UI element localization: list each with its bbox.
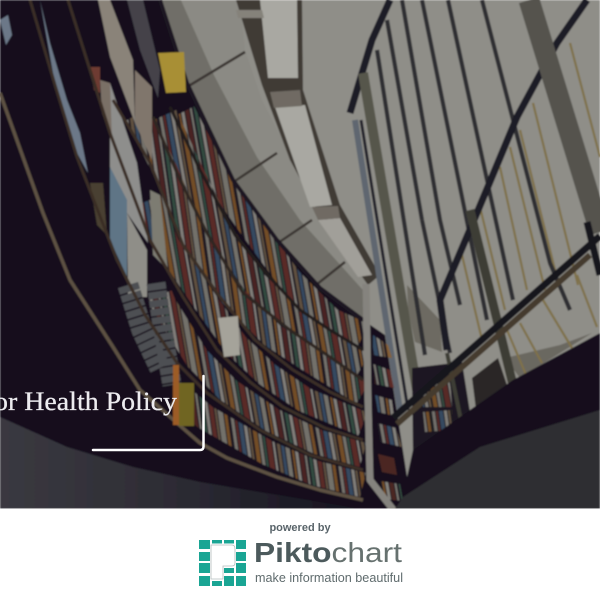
ceiling struts (187, 52, 345, 285)
white pamphlet on shelf (218, 316, 240, 357)
window books (423, 378, 452, 407)
skylight panel two (275, 105, 332, 207)
book bands (137, 112, 363, 485)
rail post (587, 222, 600, 275)
dark balcony mass (406, 332, 600, 494)
P mark outline (211, 545, 235, 579)
gold thin bars behind the rail (462, 43, 600, 377)
yellow patterned book (179, 383, 194, 426)
tagline: make information beautiful (255, 571, 403, 585)
Piktochart wordmark: Pikto chart (254, 537, 402, 568)
grey book stacks near the frame (128, 283, 172, 385)
curved ceiling band (160, 0, 363, 325)
sky lower patches (407, 285, 442, 352)
dark back wall behind right window (412, 362, 470, 455)
beam details (236, 10, 264, 18)
silver ladder (366, 284, 395, 512)
shelves (0, 0, 363, 500)
diagonal dark rail (440, 0, 587, 350)
ceiling and skylight background (241, 0, 600, 476)
upper-left pale books (0, 0, 168, 297)
slanted grey columns (355, 0, 600, 410)
skylight housing (236, 0, 380, 285)
orange book spine (173, 365, 179, 425)
powered by label: powered by (269, 522, 331, 534)
wall of shelves dark base (0, 0, 412, 509)
Piktochart logo icon (199, 540, 246, 586)
lower handrail (393, 236, 600, 418)
dark vertical rail bars (377, 0, 570, 355)
skylight panel three (318, 218, 372, 277)
light ceiling cove (181, 0, 375, 290)
right shelf books past the ladder (373, 335, 403, 501)
upper dark rail (350, 0, 390, 113)
yellow book on the top shelf (158, 52, 186, 93)
white corner frame (93, 376, 204, 450)
floor band (0, 417, 360, 509)
post in front of window (447, 353, 463, 430)
handrail underside (397, 255, 590, 424)
lower right floor (395, 410, 600, 509)
skylight panel one (260, 0, 298, 78)
